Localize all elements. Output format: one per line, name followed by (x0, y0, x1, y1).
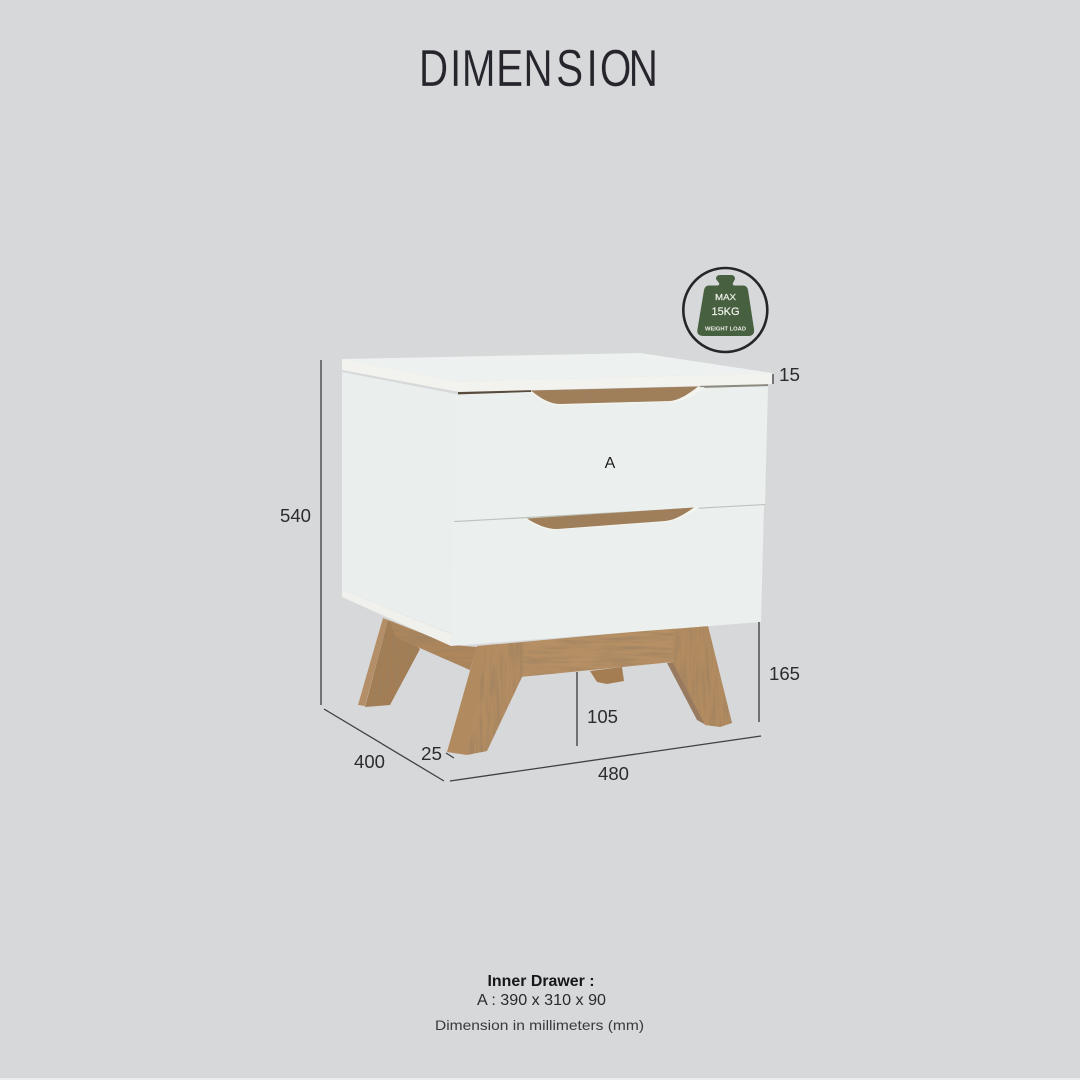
badge text: max: MAX (715, 292, 736, 302)
badge text: weight load: WEIGHT LOAD (705, 326, 746, 332)
dimension labels (280, 365, 800, 784)
tabletop surface (342, 353, 772, 382)
line: width 480 (450, 736, 761, 781)
left back leg outer strip (358, 618, 388, 706)
label 540: 540 (280, 506, 311, 526)
title: DIMENSION (419, 39, 658, 97)
gap between drawers (454, 504, 765, 522)
label 25: 25 (421, 744, 442, 764)
weight load badge (683, 268, 767, 352)
units note: Dimension in millimeters (mm) (435, 1017, 644, 1033)
left side rail (388, 620, 477, 670)
right leg inner strip (667, 662, 706, 725)
tabletop left edge (342, 359, 459, 392)
badge ring (683, 268, 767, 352)
upper drawer handle cut-out (530, 387, 705, 406)
line: top thickness 15 (772, 374, 774, 384)
line: clearance 105 (576, 672, 578, 746)
front rail (520, 628, 675, 677)
inner drawer heading: Inner Drawer : (488, 973, 594, 990)
line: depth 400 (324, 709, 444, 781)
icon: green weight (697, 275, 754, 336)
label 105: 105 (587, 707, 618, 727)
dark gap under top, right part (700, 384, 768, 388)
drawer label A: A (605, 455, 616, 472)
inner drawer size: A : 390 x 310 x 90 (477, 992, 606, 1009)
lower drawer (451, 505, 764, 646)
lower drawer wood recess (527, 508, 694, 529)
label 400: 400 (354, 752, 385, 772)
dimension lines (321, 360, 773, 781)
line: leg 25 (446, 753, 454, 758)
line: leg height 165 (758, 622, 760, 722)
back small leg (590, 667, 624, 684)
upper drawer (454, 386, 768, 521)
badge text: 15kg: 15KG (712, 306, 740, 318)
cabinet left side (342, 372, 456, 634)
dark gap under top, left part (458, 389, 531, 395)
front corner leg main face (467, 642, 524, 755)
label 480: 480 (598, 764, 629, 784)
footer notes (435, 973, 644, 1033)
front corner leg side strip (447, 645, 488, 755)
label 15: 15 (779, 365, 800, 385)
right leg main face (673, 626, 732, 727)
bedside table (342, 353, 772, 755)
left back leg inner face (365, 620, 420, 707)
label 165: 165 (769, 664, 800, 684)
upper drawer wood recess (531, 386, 698, 404)
line: height 540 (320, 360, 322, 705)
lower drawer handle cut-out (525, 507, 700, 530)
tabletop front edge (459, 373, 772, 392)
cabinet bottom edge (342, 590, 451, 646)
